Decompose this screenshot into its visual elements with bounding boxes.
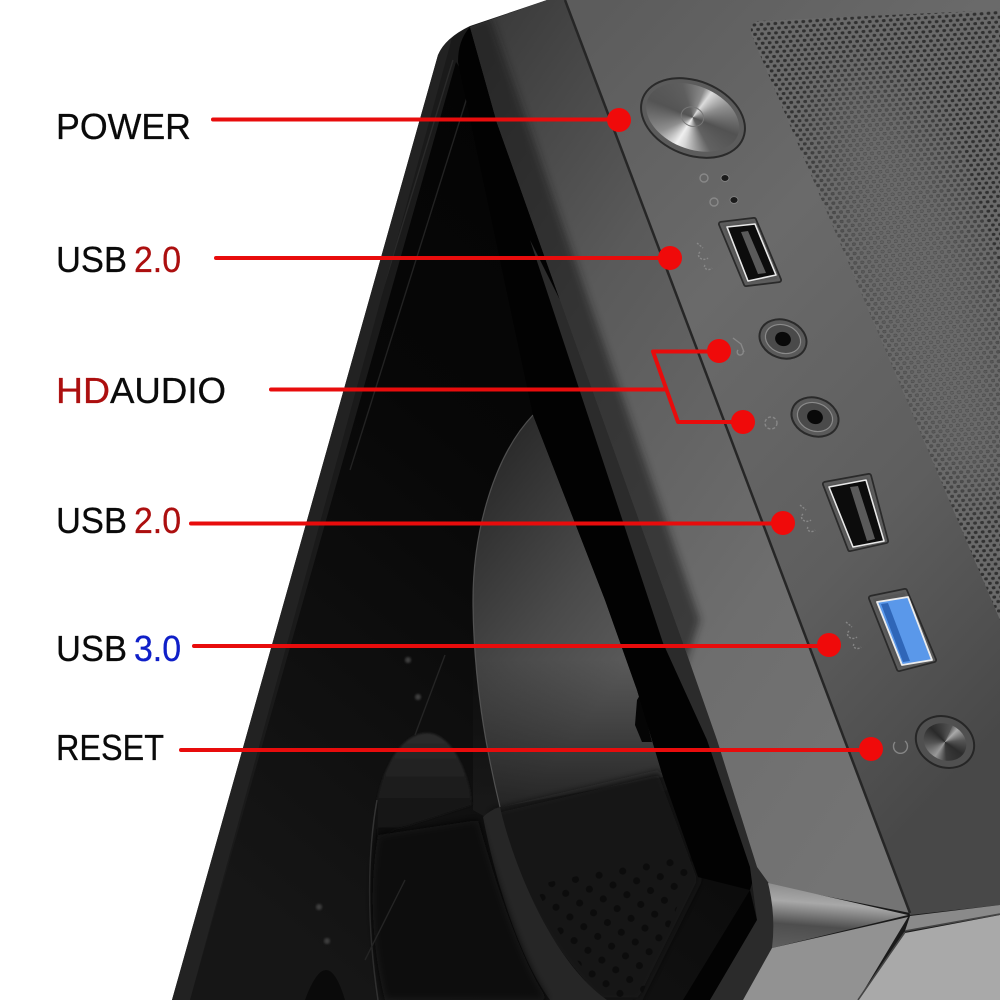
front bezel band <box>470 0 910 913</box>
reset button <box>906 705 984 779</box>
audio jack upper <box>754 313 812 365</box>
callout: usb 3.0: USB <box>56 628 127 669</box>
mesh grille <box>751 10 1000 620</box>
lower left fan shadow <box>373 820 548 1000</box>
USB 2.0 port upper <box>721 220 779 284</box>
fan dark lower shadow <box>490 772 700 1000</box>
fan grille dots <box>535 850 700 1000</box>
lower right facet <box>858 915 1000 1000</box>
USB 3.0 port <box>871 591 934 669</box>
small dark arch <box>305 970 345 1000</box>
callout: usb 2.0 upper: USB <box>56 239 127 280</box>
bezel shadow edge <box>450 16 700 680</box>
power button <box>628 62 758 174</box>
callout: reset <box>56 727 883 768</box>
audio jack lower <box>786 391 844 443</box>
callout: power <box>56 106 631 147</box>
fan fade shadow <box>473 660 668 825</box>
side glass window <box>190 60 757 1000</box>
standoff spots <box>316 657 421 944</box>
black inner frame strip <box>458 27 757 890</box>
callout: reset: RESET <box>56 727 164 768</box>
callout: usb 2.0 lower: USB <box>56 500 127 541</box>
callout: hd audio <box>56 339 755 434</box>
callout: usb 2.0 upper <box>56 239 682 280</box>
shiny corner facet <box>768 883 908 948</box>
facet seam <box>858 914 1000 1000</box>
callout: hd audio: HD <box>56 370 110 411</box>
status LEDs <box>721 175 738 203</box>
fan ring <box>483 807 607 1000</box>
callout: usb 2.0 lower: 2.0 <box>134 500 181 541</box>
mesh highlights <box>800 63 1000 516</box>
notch <box>635 695 652 742</box>
callout: hd audio: AUDIO <box>110 370 226 411</box>
small fan ring <box>370 800 378 1000</box>
panel seam <box>565 0 910 913</box>
large fan reflection <box>473 415 663 807</box>
callout: usb 3.0: 3.0 <box>134 628 181 669</box>
bright strip <box>905 905 1000 931</box>
rim of the window <box>530 240 774 1000</box>
glass reflection lines <box>300 60 470 960</box>
embossed icons <box>697 174 907 753</box>
top panel <box>565 0 1000 915</box>
lower left facet <box>743 917 908 1000</box>
callout: usb 2.0 lower <box>56 500 795 541</box>
left window edge <box>172 38 452 1000</box>
USB 2.0 port lower <box>825 476 886 549</box>
callout: usb 3.0 <box>56 628 841 669</box>
black lower corner inside <box>683 890 757 1000</box>
fan arc highlight <box>473 415 533 807</box>
small fan reflection <box>377 733 472 840</box>
callout: power: POWER <box>56 106 191 147</box>
callout: usb 2.0 upper: 2.0 <box>134 239 181 280</box>
